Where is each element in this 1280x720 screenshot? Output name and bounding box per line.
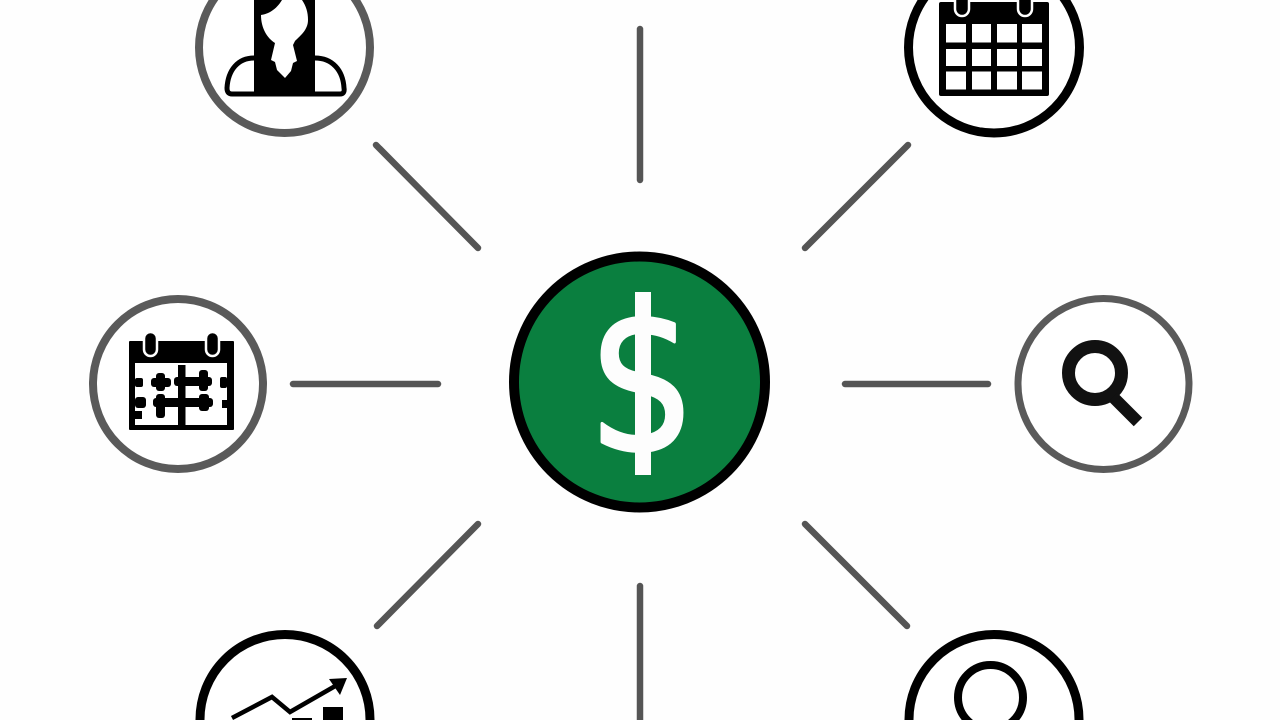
- central dollar badge: [514, 256, 765, 508]
- node: growth chart: [200, 634, 370, 720]
- node: person: [199, 0, 370, 133]
- node: magnifier: [1018, 298, 1189, 470]
- node: calendar top right: [908, 0, 1080, 133]
- connector lines: [293, 29, 988, 720]
- node: calendar left: [93, 299, 263, 469]
- node: user: [909, 634, 1079, 720]
- dollar sign: $: [588, 260, 696, 500]
